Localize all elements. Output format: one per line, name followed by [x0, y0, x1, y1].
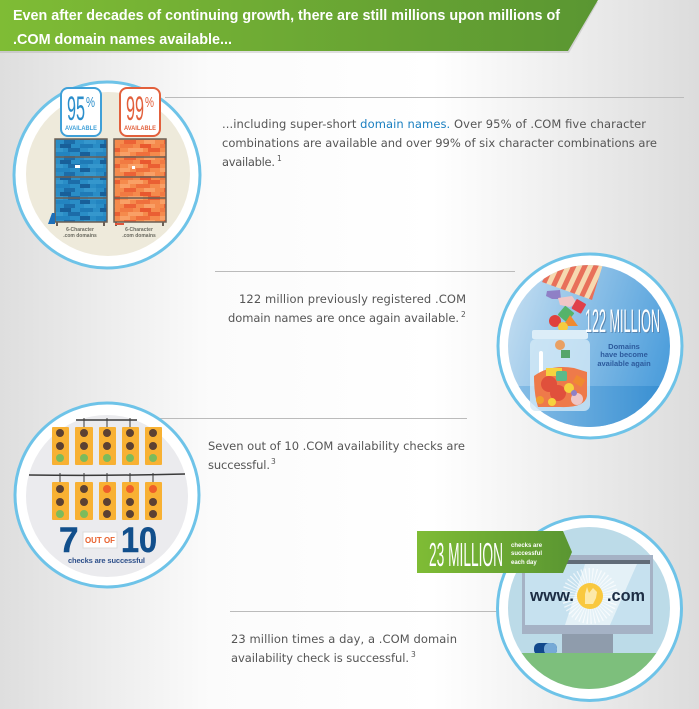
- badge: 99% available: %: [145, 94, 154, 111]
- striped bag: [542, 264, 603, 300]
- badge: 95% available: 95: [67, 90, 85, 128]
- text block: short domain names: combinations are available and over 99% of six character combinations are: [222, 136, 657, 150]
- badge: 95% available: %: [86, 94, 95, 111]
- checks caption: checks are successful: [68, 556, 145, 565]
- red shelf: [114, 139, 166, 226]
- bottom row of lights: [29, 473, 185, 520]
- text block: short domain names: ...including super-short domain names. Over 95% of .COM five character: [222, 117, 646, 131]
- shelf captions: 6-Character: [66, 227, 94, 233]
- domains caption: available again: [597, 359, 651, 368]
- 7 out of 10 label: 10: [121, 521, 157, 560]
- text block: seven out of ten: Seven out of 10 .COM availability checks are: [208, 439, 465, 453]
- text block: 122 million available: domain names are once again available.: [228, 311, 459, 325]
- heading text: Even after decades of continuing growth, there are still millions upon millions of: [13, 7, 561, 24]
- 7 out of 10 label: 7: [59, 521, 78, 560]
- monitor: [522, 555, 653, 634]
- 23 million ribbon: checks are: [511, 543, 543, 549]
- 23 million ribbon: each day: [511, 560, 537, 566]
- text block: seven out of ten: [208, 439, 465, 472]
- shelf captions: .com domains: [122, 233, 156, 239]
- 122 million label: [585, 303, 661, 340]
- badge: 99% available: 99: [126, 90, 144, 128]
- panel: 23 million monitor illustration: [417, 516, 682, 700]
- badge: 99% available: AVAILABLE: [124, 125, 157, 132]
- text block: 122 million available: 2: [461, 310, 466, 319]
- heading text: [13, 7, 561, 48]
- panel: 7 out of 10 traffic lights: [15, 403, 200, 587]
- panel: 122 million jar illustration: [498, 254, 682, 438]
- shelf captions: [63, 227, 156, 239]
- text block: short domain names: [222, 117, 657, 169]
- text block: 23 million times: [231, 632, 457, 665]
- text block: short domain names: 1: [277, 154, 282, 163]
- domains caption: Domains: [608, 342, 640, 351]
- heading text: .COM domain names available...: [13, 31, 232, 48]
- shelf captions: 6-Character: [125, 227, 153, 233]
- text block: 122 million available: [228, 292, 466, 325]
- text block: 23 million times: 23 million times a day, a .COM domain: [231, 632, 457, 646]
- badge: 99% available: [120, 88, 160, 136]
- text block: 23 million times: availability check is successful.: [231, 651, 409, 665]
- text block: short domain names: available.: [222, 155, 275, 169]
- www dot com address: [529, 576, 645, 616]
- top row of lights: [52, 418, 162, 465]
- domains caption: [597, 342, 651, 368]
- 23 million ribbon: 23 MILLION: [429, 536, 503, 573]
- falling candy: [546, 290, 586, 332]
- 23 million ribbon: successful: [511, 551, 542, 557]
- text block: 23 million times: 3: [411, 650, 416, 659]
- badge: 95% available: AVAILABLE: [65, 125, 98, 132]
- text block: seven out of ten: 3: [271, 457, 276, 466]
- glass jar: [530, 330, 590, 411]
- 23 million ribbon: [417, 531, 572, 573]
- text block: 122 million available: 122 million previously registered .COM: [239, 292, 466, 306]
- badge: 95% available: [61, 88, 101, 136]
- domains caption: have become: [600, 350, 648, 359]
- www dot com address: .com: [607, 587, 645, 605]
- panel: 95% and 99% availability illustration: [14, 82, 200, 268]
- 7 out of 10 label: OUT OF: [85, 536, 115, 545]
- 7 out of 10 label: [59, 521, 157, 560]
- www dot com address: www.: [529, 587, 574, 605]
- heading banner: [0, 0, 598, 53]
- shelf captions: .com domains: [63, 233, 97, 239]
- blue shelf: [48, 139, 107, 226]
- text block: seven out of ten: successful.: [208, 458, 270, 472]
